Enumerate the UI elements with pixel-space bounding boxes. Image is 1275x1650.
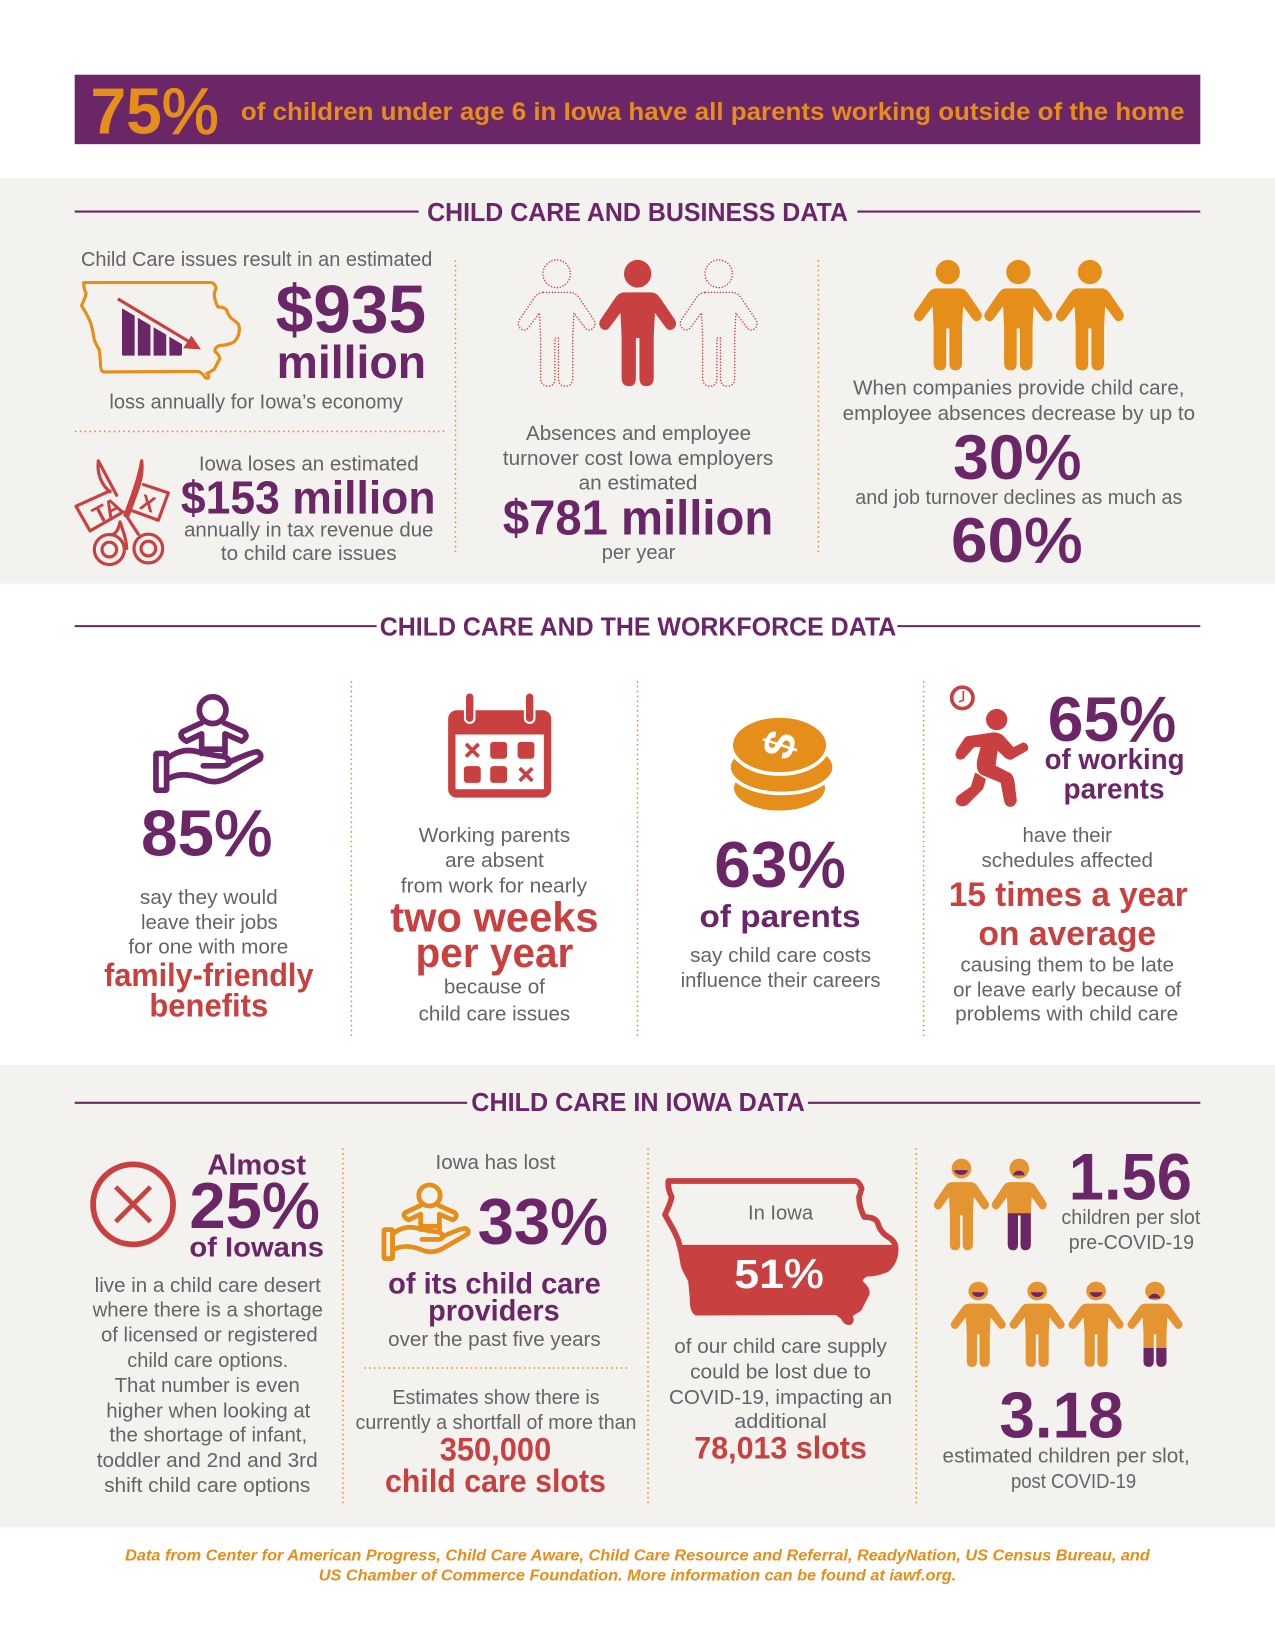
panel: companies providing child care: 30% bbox=[953, 423, 1081, 493]
panel: $935 million: loss annually for Iowa’s economy bbox=[109, 390, 404, 413]
panel: 63 percent bbox=[681, 716, 881, 992]
icon: Iowa map with falling bars bbox=[82, 283, 239, 378]
panel: $935 million: $935 bbox=[276, 273, 426, 348]
banner statistic: 75% bbox=[90, 75, 219, 148]
panel: 65 percent: causing them to be late bbox=[960, 953, 1174, 976]
panel: 85 percent: leave their jobs bbox=[141, 911, 278, 934]
icon: three figures, two dotted bbox=[518, 260, 757, 386]
panel: child care desert: toddler and 2nd and 3rd bbox=[97, 1449, 318, 1472]
panel: absences and turnover: $781 million bbox=[503, 491, 773, 546]
panel: $935 million: million bbox=[277, 336, 426, 388]
panel: two weeks per year: are absent bbox=[445, 849, 544, 872]
panel: children per slot bbox=[934, 1141, 1201, 1493]
icon: coin stack: $ bbox=[752, 725, 807, 765]
panel: child care desert: where there is a shortage bbox=[92, 1298, 323, 1321]
panel: two weeks per year: child care issues bbox=[419, 1003, 570, 1026]
panel: children per slot: pre-COVID-19 bbox=[1069, 1231, 1194, 1254]
footer sources: Data from Center for American Progress, Child Care Aware, Child Care Resource and Referral, ReadyNation, US Census Bureau, and bbox=[125, 1548, 1150, 1565]
panel: providers lost: over the past five years bbox=[388, 1328, 601, 1351]
panel: child care desert: Almost bbox=[207, 1149, 307, 1181]
panel: absences and turnover: turnover cost Iowa employers bbox=[503, 447, 773, 470]
panel: $153 million: to child care issues bbox=[221, 542, 397, 565]
panel: child care desert: the shortage of infant, bbox=[109, 1424, 307, 1447]
panel: two weeks per year: from work for nearly bbox=[401, 874, 588, 897]
banner text: of children under age 6 in Iowa have all parents working outside of the home bbox=[241, 98, 1185, 126]
icon: two children figures bbox=[934, 1159, 1047, 1250]
panel: 65 percent: of working bbox=[1045, 744, 1185, 776]
panel: child care desert bbox=[92, 1149, 324, 1497]
panel: companies providing child care: and job turnover declines as much as bbox=[855, 486, 1182, 509]
panel: 65 percent: parents bbox=[1064, 774, 1165, 806]
panel: shortfall bbox=[356, 1386, 636, 1499]
panel: absences and turnover: an estimated bbox=[579, 471, 697, 494]
panel: 51 percent: In Iowa bbox=[748, 1202, 814, 1225]
panel: shortfall: currently a shortfall of more than bbox=[356, 1411, 636, 1434]
panel: 51 percent bbox=[665, 1181, 896, 1465]
panel: $153 million: annually in tax revenue due bbox=[184, 519, 433, 542]
icon: calendar bbox=[448, 692, 551, 798]
panel: 65 percent: schedules affected bbox=[981, 849, 1153, 872]
panel: 85 percent: for one with more bbox=[128, 935, 288, 958]
panel: companies providing child care: employee absences decrease by up to bbox=[843, 402, 1195, 425]
icon: scissors cutting tax: TA bbox=[88, 492, 126, 529]
panel: absences and turnover bbox=[503, 260, 773, 564]
panel: two weeks per year: Working parents bbox=[419, 824, 570, 847]
panel: children per slot: 3.18 bbox=[999, 1378, 1124, 1451]
panel: 63 percent: say child care costs bbox=[690, 944, 871, 967]
panel: 65 percent: on average bbox=[978, 915, 1156, 953]
panel: 85 percent: family-friendly bbox=[104, 956, 313, 993]
panel: 51 percent: COVID-19, impacting an bbox=[669, 1386, 892, 1409]
panel: providers lost: of its child care bbox=[388, 1267, 601, 1300]
panel: 51 percent: 78,013 slots bbox=[694, 1429, 867, 1465]
icon: scissors cutting tax: X bbox=[137, 489, 159, 518]
panel: children per slot: estimated children per slot, bbox=[943, 1445, 1190, 1468]
footer sources bbox=[125, 1548, 1150, 1585]
panel: children per slot: post COVID-19 bbox=[1011, 1470, 1136, 1493]
panel: child care desert: child care options. bbox=[127, 1349, 288, 1372]
icon: scissors cutting tax bbox=[76, 461, 168, 565]
panel: 51 percent: of our child care supply bbox=[674, 1335, 888, 1358]
panel: 65 percent: or leave early because of bbox=[953, 979, 1182, 1002]
panel: child care desert: That number is even bbox=[115, 1374, 300, 1397]
icon: hand holding child, orange bbox=[384, 1185, 468, 1259]
icon: four children figures bbox=[951, 1282, 1183, 1367]
icon: red X circle bbox=[93, 1164, 173, 1244]
panel: $935 million: Child Care issues result in an estimated bbox=[81, 248, 432, 271]
panel: absences and turnover: per year bbox=[602, 541, 676, 564]
panel: $153 million: Iowa loses an estimated bbox=[199, 452, 419, 475]
panel: child care desert: 25% bbox=[189, 1169, 320, 1242]
icon: coin stack bbox=[729, 716, 834, 812]
panel: 65 percent: problems with child care bbox=[955, 1003, 1178, 1026]
panel: 85 percent: 85% bbox=[141, 797, 272, 870]
panel: child care desert: higher when looking at bbox=[106, 1399, 311, 1422]
panel: 51 percent: could be lost due to bbox=[690, 1361, 871, 1384]
panel: shortfall: Estimates show there is bbox=[392, 1386, 600, 1409]
footer sources: US Chamber of Commerce Foundation. More information can be found at iawf.org. bbox=[319, 1568, 956, 1585]
panel: providers lost: providers bbox=[428, 1295, 560, 1328]
panel: two weeks per year: because of bbox=[444, 975, 545, 998]
panel: shortfall: child care slots bbox=[385, 1462, 606, 1499]
panel: $153 million: $153 million bbox=[181, 472, 436, 524]
panel: 65 percent: have their bbox=[1023, 824, 1112, 847]
panel: two weeks per year bbox=[390, 692, 599, 1026]
icon: Iowa map half filled bbox=[665, 1181, 896, 1322]
panel: shortfall: 350,000 bbox=[440, 1431, 551, 1468]
panel: 85 percent: say they would bbox=[140, 886, 278, 909]
heading: business data: CHILD CARE AND BUSINESS DATA bbox=[427, 197, 848, 227]
panel: 51 percent: 51% bbox=[734, 1251, 824, 1297]
panel: absences and turnover: Absences and employee bbox=[526, 422, 751, 445]
panel: 63 percent: influence their careers bbox=[681, 969, 881, 992]
heading: workforce data: CHILD CARE AND THE WORKFORCE DATA bbox=[380, 612, 896, 642]
icon: hand holding child bbox=[156, 697, 261, 790]
panel: child care desert: of Iowans bbox=[189, 1231, 324, 1262]
panel: child care desert: live in a child care desert bbox=[95, 1274, 321, 1297]
icon: three orange figures bbox=[914, 260, 1124, 370]
panel: 65 percent bbox=[949, 685, 1188, 1026]
icon: running person with clock bbox=[952, 687, 1027, 806]
panel: companies providing child care bbox=[843, 260, 1195, 576]
panel: providers lost: Iowa has lost bbox=[436, 1151, 556, 1174]
panel: 85 percent: benefits bbox=[149, 987, 268, 1024]
panel: two weeks per year: two weeks bbox=[390, 893, 599, 940]
panel: children per slot: children per slot bbox=[1061, 1206, 1201, 1229]
panel: 65 percent: 15 times a year bbox=[949, 876, 1188, 914]
banner bbox=[75, 75, 1200, 148]
panel: 85 percent bbox=[104, 697, 313, 1024]
panel: $935 million bbox=[81, 248, 432, 413]
heading: Iowa data: CHILD CARE IN IOWA DATA bbox=[471, 1087, 805, 1117]
panel: companies providing child care: 60% bbox=[951, 506, 1082, 576]
panel: 51 percent: additional bbox=[734, 1410, 827, 1433]
panel: child care desert: of licensed or registered bbox=[101, 1324, 318, 1347]
panel: 63 percent: 63% bbox=[714, 828, 846, 901]
panel: $153 million bbox=[76, 452, 436, 565]
panel: providers lost: 33% bbox=[478, 1185, 608, 1258]
panel: providers lost bbox=[384, 1151, 608, 1351]
panel: child care desert: shift child care options bbox=[104, 1474, 310, 1497]
panel: two weeks per year: per year bbox=[416, 929, 573, 976]
panel: children per slot: 1.56 bbox=[1069, 1141, 1192, 1215]
panel: 65 percent: 65% bbox=[1048, 685, 1176, 755]
panel: companies providing child care: When companies provide child care, bbox=[853, 377, 1185, 400]
panel: 63 percent: of parents bbox=[700, 898, 861, 934]
